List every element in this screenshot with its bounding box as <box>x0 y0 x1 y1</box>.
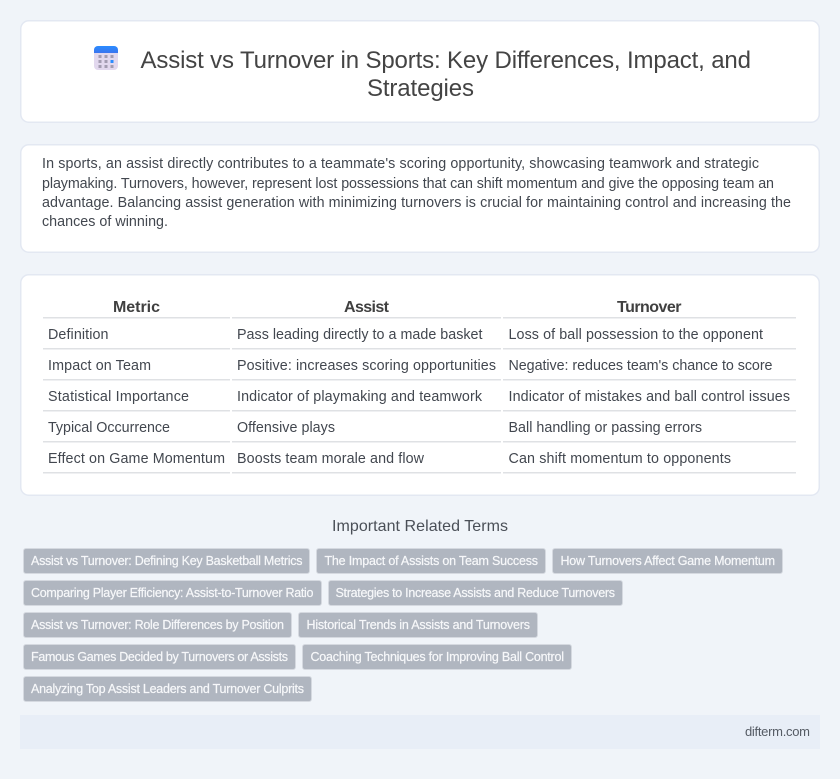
row: impact on team: Impact on Team <box>48 358 151 374</box>
title: Assist vs Turnover in Sports: Key Differences, Impact, and <box>140 47 751 74</box>
table header row: Turnover <box>617 299 682 316</box>
tag: Historical Trends in Assists and Turnovers <box>306 618 530 632</box>
tag <box>24 548 310 574</box>
intro text: chances of winning. <box>42 214 168 230</box>
row: typical occurrence <box>43 420 796 442</box>
row: definition: Definition <box>48 327 109 343</box>
intro text <box>42 156 791 230</box>
tag <box>328 580 622 606</box>
row: statistical importance: Indicator of mistakes and ball control issues <box>508 389 790 405</box>
row: impact on team <box>43 358 796 380</box>
table header row <box>43 299 796 318</box>
heading: important related terms: Important Related Terms <box>332 518 508 535</box>
footer <box>20 715 820 749</box>
intro text: playmaking. Turnovers, however, represent lost possessions that can shift momentum and give the opposing team an <box>42 176 774 192</box>
panel: header <box>21 21 819 122</box>
tag <box>24 676 312 702</box>
panel: comparison table <box>21 275 819 495</box>
table header row: Metric <box>113 299 160 316</box>
tag: Assist vs Turnover: Role Differences by Position <box>31 618 284 632</box>
tag <box>298 612 538 638</box>
title <box>140 47 751 102</box>
row: statistical importance: Statistical Importance <box>48 389 189 405</box>
row: definition: Loss of ball possession to the opponent <box>508 327 763 343</box>
tag: Coaching Techniques for Improving Ball Control <box>310 650 564 664</box>
tag: Strategies to Increase Assists and Reduce Turnovers <box>336 586 615 600</box>
tag <box>302 644 572 670</box>
tag: How Turnovers Affect Game Momentum <box>560 554 775 568</box>
row: definition <box>43 327 796 350</box>
row: effect on game momentum <box>43 451 796 474</box>
tag: Famous Games Decided by Turnovers or Assists <box>31 650 288 664</box>
tag <box>24 644 296 670</box>
tag: Comparing Player Efficiency: Assist-to-Turnover Ratio <box>31 586 314 600</box>
tag: The Impact of Assists on Team Success <box>324 554 538 568</box>
row: effect on game momentum: Boosts team morale and flow <box>237 451 425 467</box>
tag <box>24 580 322 606</box>
intro text: In sports, an assist directly contributes to a teammate's scoring opportunity, showcasing teamwork and strategic <box>42 156 759 172</box>
row: statistical importance <box>43 389 796 412</box>
panel: intro paragraph <box>21 145 819 252</box>
table header row: Assist <box>344 299 390 316</box>
row: impact on team: Negative: reduces team's chance to score <box>508 358 773 374</box>
row: typical occurrence: Typical Occurrence <box>48 420 170 436</box>
title: Strategies <box>367 75 474 102</box>
row: typical occurrence: Ball handling or passing errors <box>508 420 702 436</box>
tag: Assist vs Turnover: Defining Key Basketball Metrics <box>31 554 302 568</box>
intro text: advantage. Balancing assist generation with minimizing turnovers is crucial for maintaining control and increasing the <box>42 195 791 211</box>
related term tags <box>24 548 782 702</box>
tag <box>24 612 292 638</box>
tag: Analyzing Top Assist Leaders and Turnover Culprits <box>31 682 304 696</box>
row: statistical importance: Indicator of playmaking and teamwork <box>237 389 483 405</box>
row: definition: Pass leading directly to a made basket <box>237 327 483 343</box>
row: effect on game momentum: Effect on Game Momentum <box>48 451 225 467</box>
tag <box>552 548 782 574</box>
row: effect on game momentum: Can shift momentum to opponents <box>508 451 731 467</box>
footer: difterm.com <box>745 724 810 739</box>
icon: calendar <box>94 46 118 70</box>
row: impact on team: Positive: increases scoring opportunities <box>237 358 496 374</box>
tag <box>316 548 546 574</box>
row: typical occurrence: Offensive plays <box>237 420 335 436</box>
